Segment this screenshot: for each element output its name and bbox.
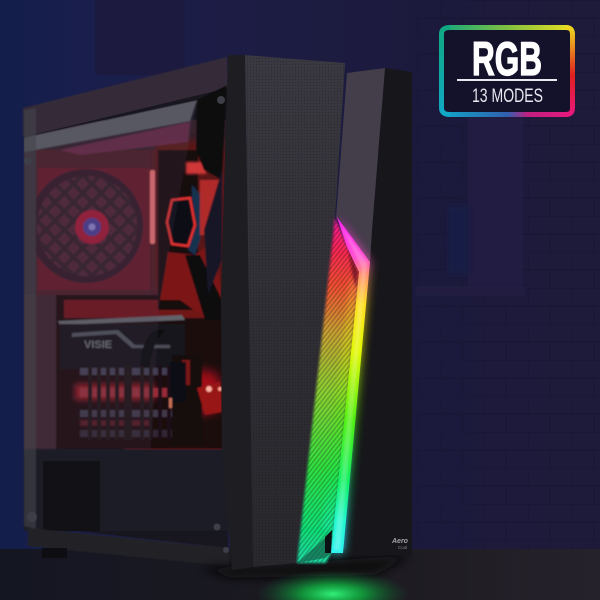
grey lit panel above strip: [336, 68, 385, 262]
logo: Cool: [398, 545, 407, 550]
glass reflection haze: [36, 106, 197, 449]
fan: [29, 169, 143, 283]
logo: [391, 538, 409, 550]
cpu cooler hexagon: [158, 150, 220, 310]
fan housing: [38, 168, 150, 290]
main front panel: [245, 55, 345, 567]
feet: [42, 548, 67, 558]
logo: Aero: [391, 538, 409, 545]
dark pillar and cables: [196, 85, 227, 180]
glass side interior: [24, 85, 229, 548]
graphics card: [58, 315, 185, 372]
bevel: [221, 55, 253, 570]
badge subtext: 13 MODES: [472, 86, 543, 107]
shadow under case: [200, 555, 412, 578]
pc case: [23, 50, 412, 600]
badge: RGB 13 modes: [442, 28, 572, 114]
bottom rail: [28, 528, 229, 566]
bright bar: [331, 217, 370, 553]
lower shroud: [24, 449, 229, 531]
led strip beside fan: [150, 170, 155, 244]
top panel: [23, 57, 228, 137]
motherboard red glow: [125, 355, 222, 452]
screws: [24, 96, 229, 553]
psu vent: [43, 461, 100, 531]
badge heading: RGB: [472, 32, 542, 85]
floor glow: [257, 570, 409, 600]
glow: [331, 217, 370, 553]
light strip under top panel: [24, 100, 197, 152]
graphics card: VISIE: [84, 339, 112, 351]
rgb light strip: [297, 217, 370, 563]
hatched panel: [297, 218, 359, 563]
left frame edge: [24, 108, 36, 530]
expansion slots: [80, 368, 180, 437]
right front panel: [345, 68, 412, 556]
floor: [0, 549, 600, 600]
interior red lighting: [24, 120, 229, 455]
